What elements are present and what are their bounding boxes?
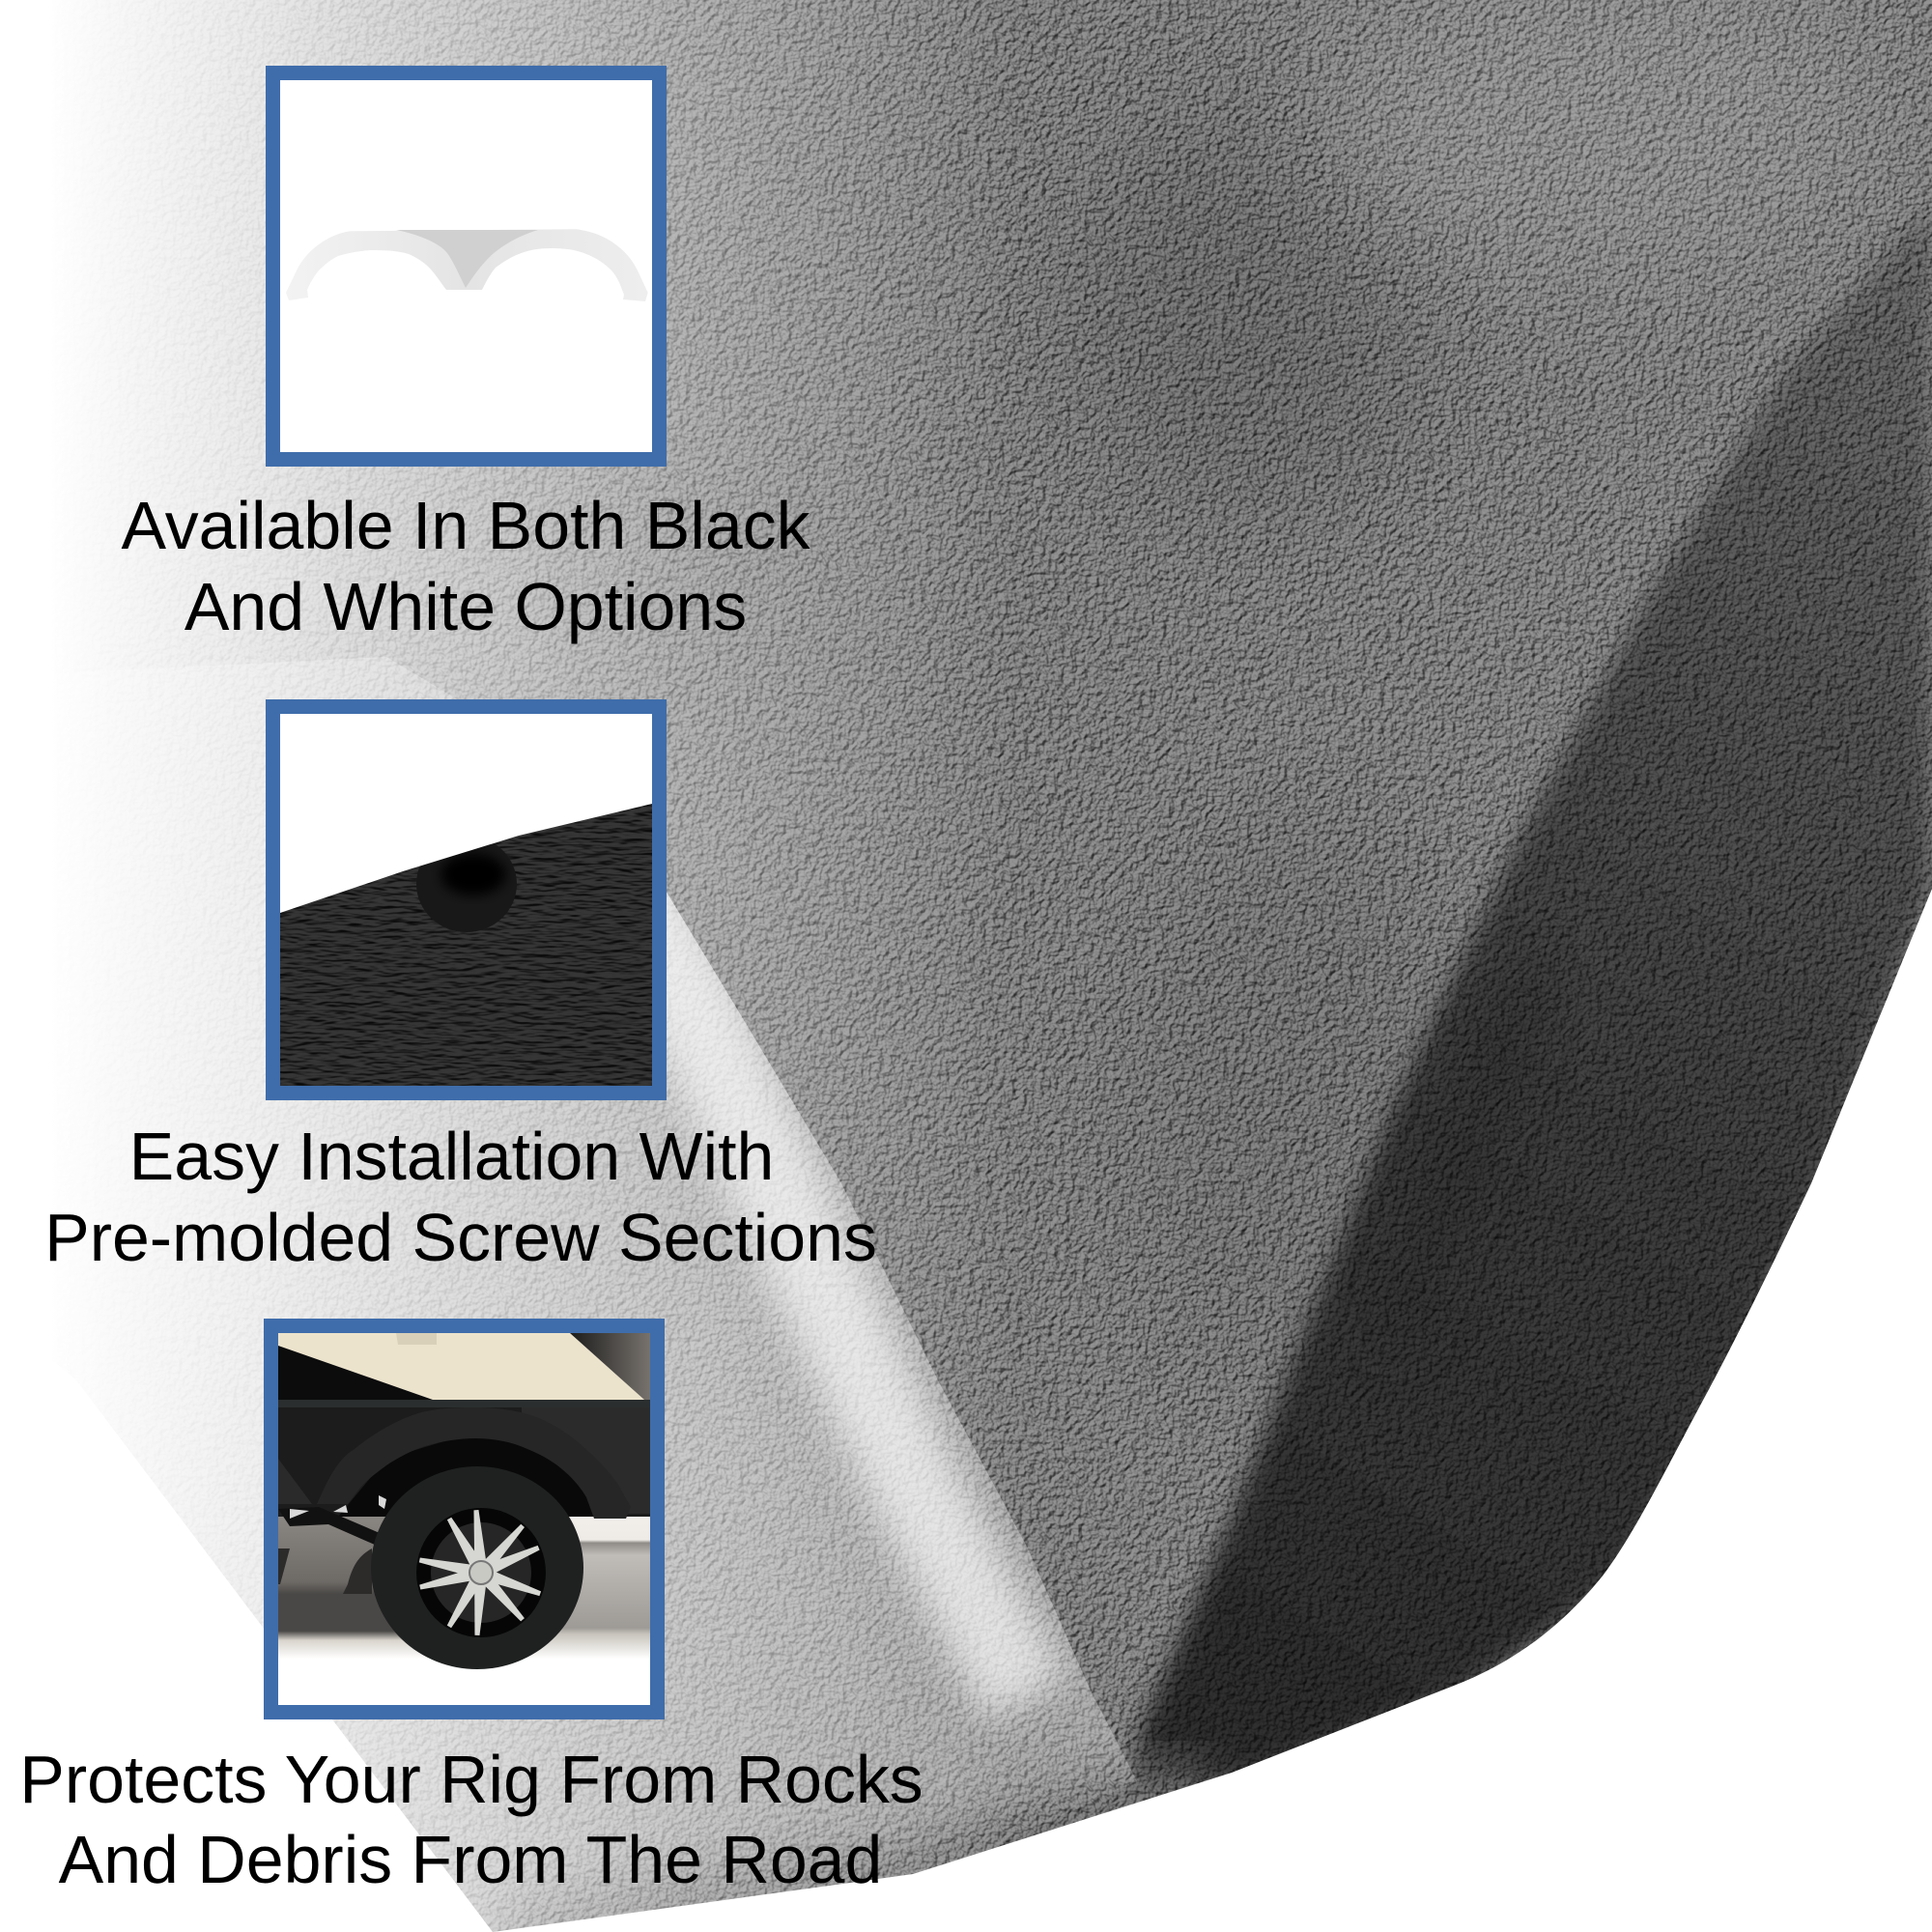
panel: white fender option: [272, 73, 659, 460]
caption: easy installation: Pre-molded Screw Sections: [44, 1200, 877, 1275]
panel: pre-molded screw section: [272, 707, 659, 1094]
caption: easy installation: [44, 1119, 877, 1275]
caption: easy installation: Easy Installation With: [129, 1119, 774, 1194]
caption: road protection: Protects Your Rig From Rocks: [19, 1742, 923, 1817]
caption: road protection: And Debris From The Road: [59, 1822, 882, 1897]
image: white fender: [286, 229, 648, 301]
image: trailer wheel: [278, 1333, 650, 1705]
panel: fender installed on trailer: [270, 1325, 657, 1712]
image: black textured fender with screw dimple: [280, 804, 652, 1086]
caption: colour options: Available In Both Black: [121, 488, 811, 563]
caption: colour options: [121, 488, 811, 644]
wheel: [371, 1466, 583, 1669]
caption: road protection: [19, 1742, 923, 1897]
caption: colour options: And White Options: [185, 569, 747, 644]
